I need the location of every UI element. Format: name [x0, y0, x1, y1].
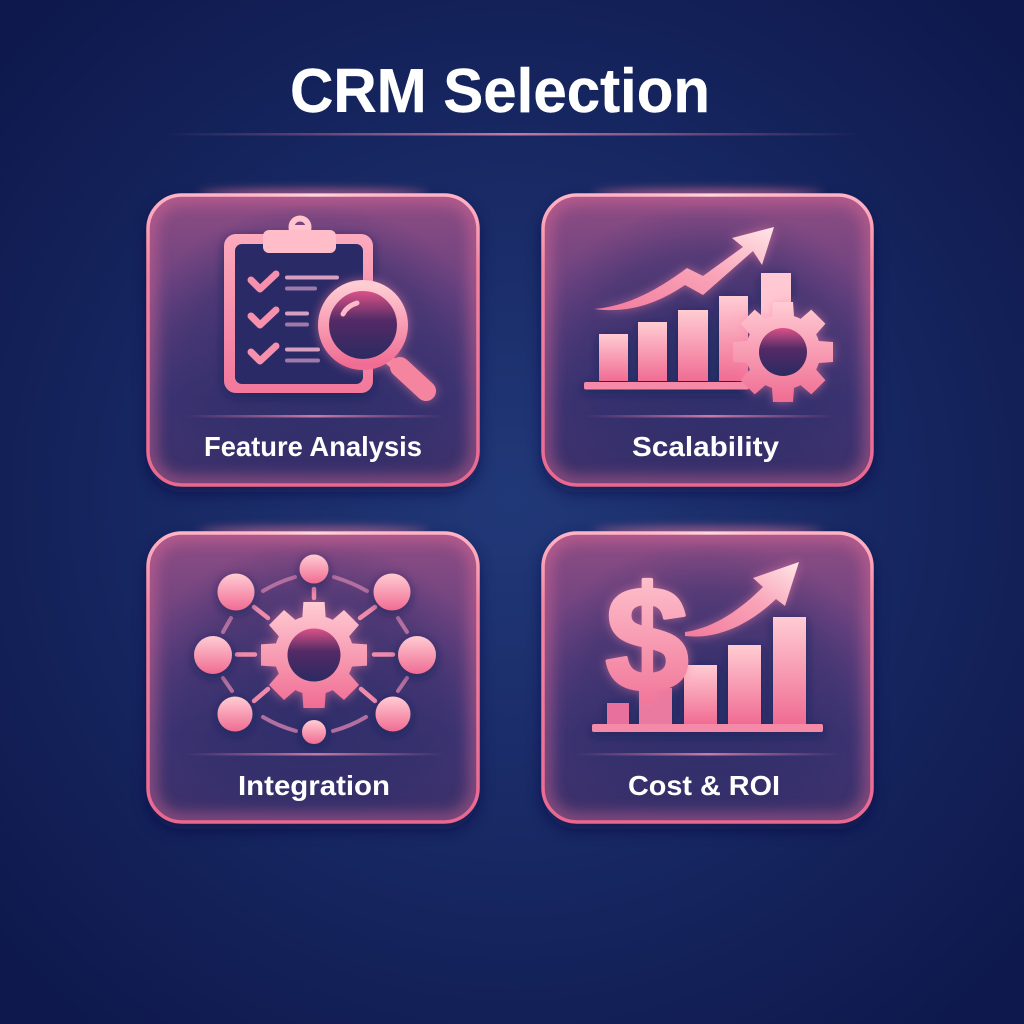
icon: dollar and rising bars — [592, 555, 823, 732]
label: Cost & ROI: Cost & ROI — [628, 770, 780, 801]
growth arrow — [594, 227, 774, 310]
title: CRM Selection — [290, 57, 710, 126]
label: Feature Analysis: Feature Analysis — [204, 431, 422, 462]
icon: clipboard with magnifier — [224, 218, 426, 393]
panel: Scalability — [543, 190, 872, 492]
bars — [584, 273, 791, 390]
icon: magnifier — [324, 286, 426, 391]
panel: Feature Analysis — [148, 190, 478, 492]
central gear — [261, 602, 367, 708]
gear — [733, 302, 833, 402]
panel: Integration — [148, 528, 478, 829]
dollar sign: $ — [605, 555, 689, 723]
icon: integration network — [194, 554, 436, 744]
icon: growth chart with gear — [584, 227, 833, 402]
label: Integration: Integration — [238, 770, 390, 801]
connectors — [223, 577, 407, 731]
rising arrow — [685, 562, 799, 637]
nodes — [194, 554, 436, 744]
panel: Cost & ROI — [543, 528, 872, 829]
label: Scalability: Scalability — [632, 431, 779, 462]
bars — [592, 617, 823, 732]
